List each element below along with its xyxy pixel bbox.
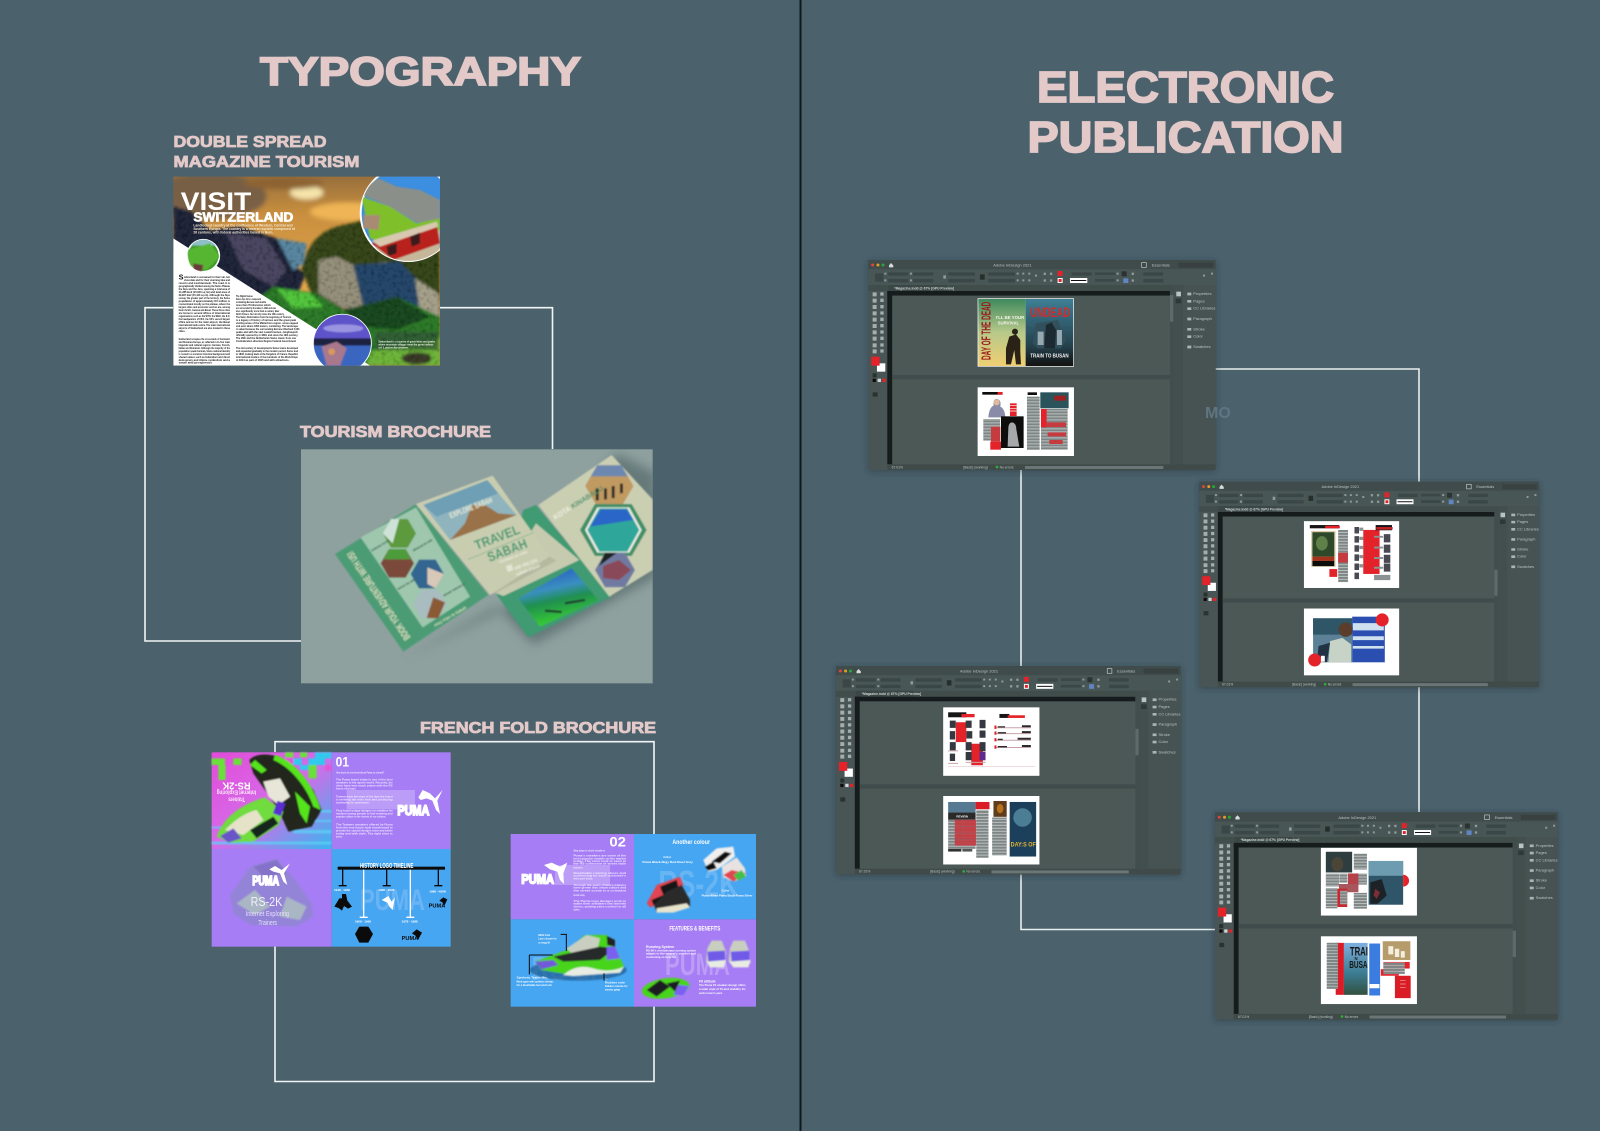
article column 2: and even where 1800 meters, combining. The landscape bbox=[236, 324, 298, 328]
window: InDesign screen two: *Magazine.indd @ 67% [GPU Preview] bbox=[1225, 507, 1283, 511]
hexagon photo: sunset pier bbox=[585, 465, 633, 507]
quadrant: 01 article: today and with style. The right shoe is bbox=[336, 831, 393, 835]
article column 1: occupy the greater part of the territory, the Swiss bbox=[179, 296, 230, 300]
panel: french fold brochure, side one bbox=[212, 752, 451, 947]
heading: double spread magazine tourism: DOUBLE SPREAD bbox=[174, 134, 326, 151]
front cover panel bbox=[416, 475, 532, 596]
screen page: movie cover spread: TRAIN TO BUSAN bbox=[1030, 354, 1069, 360]
window: InDesign screen one: 67.01% bbox=[892, 465, 903, 469]
screen page: feature spread with poster: REVIEW bbox=[956, 815, 968, 819]
window: InDesign screen four: Stroke bbox=[1536, 878, 1548, 883]
window: InDesign screen four bbox=[1215, 812, 1558, 1020]
quadrant: 01 article: The Trainers sneakers offered by Puma bbox=[336, 822, 393, 826]
article column 2: is valued because the surrounding Bernese Oberland 2,000 bbox=[236, 327, 300, 331]
icon: puma cat bbox=[418, 790, 443, 814]
screen page: movie cover spread: DAY OF THE DEAD bbox=[979, 302, 993, 360]
quadrant: another colour: Puma Black-Nrgy Red-Steel Grey bbox=[642, 860, 693, 864]
article column 1: linguistic and cultural regions: German, French, bbox=[179, 343, 230, 347]
circular photo: green valley bbox=[187, 238, 220, 272]
article column 2: in 1848, looking back at the Kingdom of France. Republic bbox=[236, 352, 298, 356]
quadrant: features and benefits: a wide style of fit and stability for bbox=[699, 987, 746, 991]
window: InDesign screen one bbox=[868, 260, 1216, 470]
quadrant: features and benefits: The Puma Fit sneaker design offers bbox=[699, 983, 746, 987]
screen page: movie cover spread: UNDEAD bbox=[1030, 304, 1070, 320]
quadrant: shoe anatomy: Mid Cut bbox=[538, 933, 550, 937]
centre divider bbox=[800, 0, 802, 1131]
title: electronic publication: ELECTRONIC bbox=[1037, 63, 1334, 112]
connector frame: magazine to brochure bbox=[145, 308, 552, 641]
cover contact details: sabah.travel bbox=[515, 563, 541, 577]
window: InDesign screen two: Color bbox=[1517, 554, 1527, 559]
window: InDesign screen three: 67.01% bbox=[859, 870, 870, 874]
quadrant: shoe anatomy: RS-2K bbox=[532, 951, 608, 988]
article column 1: shared values such as federalism and direct bbox=[179, 355, 230, 359]
left leaf: small captions bbox=[370, 538, 468, 628]
article column 1: population speak German, Swiss national identity bbox=[179, 349, 230, 353]
quadrant: 01 article: They found unique designs on sneakers for bbox=[336, 808, 393, 812]
left leaf: book your adventure: BOOK YOUR ADVENTURE WITH US! bbox=[345, 549, 413, 642]
screen page: interview spread bbox=[978, 387, 1074, 456]
connector lines: electronic publication windows bbox=[1021, 369, 1419, 930]
left leaf: small captions: easy trips to Sabah bbox=[433, 605, 468, 628]
quadrant: 02 article: 02 bbox=[609, 834, 626, 850]
screen page: movie cover spread: I'LL BE YOUR bbox=[996, 315, 1025, 320]
quadrant: features and benefits: PUMA bbox=[665, 946, 730, 982]
article column 2: and expanded gradually in the modern period. Swiss and bbox=[236, 349, 298, 353]
circular photo: red train bbox=[360, 176, 440, 262]
quadrant: RS-2K cover: Trainers bbox=[258, 918, 277, 927]
article column 2 bbox=[236, 294, 300, 362]
quadrant: history logo timeline: 1948 - 1958 bbox=[334, 888, 350, 892]
article column 1: international bank centre. The main international bbox=[179, 323, 230, 327]
article column 1: the Alps and the Jura, spanning a total area of bbox=[179, 287, 230, 291]
quadrant: shoe anatomy: Lace closure for bbox=[538, 937, 557, 941]
faint background word over window: MO bbox=[1205, 405, 1231, 422]
quadrant: 01 article: history of the brand. bbox=[336, 786, 356, 790]
magazine intro bbox=[193, 224, 296, 234]
window: InDesign screen three: Pages bbox=[1159, 704, 1170, 709]
heading: french fold brochure: FRENCH FOLD BROCHURE bbox=[420, 720, 656, 737]
article column 1: concentrated mostly on the plateau, where the bbox=[179, 302, 230, 306]
article column 2: officially opened by in 1848, and since the 19th century, bbox=[236, 333, 298, 337]
article column 2: The Digital Suisse bbox=[236, 294, 253, 298]
right leaf: inner page bbox=[495, 523, 579, 596]
article column 2: containing Bernese and double bbox=[236, 300, 266, 304]
quadrant: 02 article: Through the years, Puma's trainers bbox=[573, 883, 626, 887]
window: InDesign screen three: Color bbox=[1159, 739, 1169, 744]
quadrant: another colour: RS-2K bbox=[658, 864, 739, 905]
quadrant: 02 article: The Puma logo designs look to bbox=[573, 899, 626, 903]
cast shadows bbox=[444, 451, 652, 647]
quadrant: 02 article: PUMA bbox=[521, 872, 554, 887]
quadrant: 01 article bbox=[332, 752, 451, 849]
quadrant: 02 article: Puma's sneakers are some of the bbox=[573, 854, 627, 858]
title: typography: TYPOGRAPHY bbox=[260, 50, 581, 94]
window: InDesign screen four: [Basic] (working) bbox=[1309, 1015, 1333, 1019]
window: InDesign screen two: Paragraph bbox=[1517, 536, 1535, 541]
left leaf: small captions: SIPADAN ISLAND bbox=[412, 538, 433, 553]
article column 1: chocolate and for their stunning lake and bbox=[184, 278, 230, 282]
window: InDesign screen two bbox=[1199, 482, 1539, 687]
timeline logos: PUMA bbox=[429, 903, 445, 909]
quadrant: 02 article: feet and style. bbox=[573, 876, 594, 880]
quadrant: glitch sneaker photo: Trainers bbox=[228, 795, 245, 801]
window: InDesign screen four: Swatches bbox=[1536, 895, 1553, 900]
quadrant: 01 article: from the very future style transformed to bbox=[336, 825, 393, 829]
photo caption: of Lauterbrunnen bbox=[378, 346, 409, 350]
article column 1: largest cities and economic centres are, among bbox=[179, 305, 230, 309]
window: InDesign screen three: CC Libraries bbox=[1159, 711, 1181, 716]
window: InDesign screen three: *Magazine.indd @ 67% [GPU Preview] bbox=[862, 692, 921, 696]
article column 2: Swiss Alps form a compound bbox=[236, 297, 261, 301]
window: InDesign screen three: Stroke bbox=[1159, 732, 1171, 737]
photo caption bbox=[378, 340, 435, 348]
hexagon photo: turquoise sea bbox=[580, 504, 647, 556]
quadrant: glitch sneaker photo bbox=[212, 752, 332, 849]
window: InDesign screen four: Essentials bbox=[1495, 815, 1513, 820]
heading: double spread magazine tourism: MAGAZINE TOURISM bbox=[174, 154, 360, 171]
article column 1: are home to several offices of international bbox=[179, 311, 230, 315]
timeline logos bbox=[334, 894, 447, 943]
left leaf: small captions: GUNUNG PUTRI bbox=[370, 539, 390, 553]
quadrant: history logo timeline: 1988 - NOW bbox=[429, 890, 446, 894]
article column 1: Italian and Romansh. Although the majority of the bbox=[179, 346, 230, 350]
left leaf: small captions: MAGIC ISLAND bbox=[397, 578, 416, 591]
quadrant: shoe anatomy: Mesh upper with synthetic overlays bbox=[517, 979, 554, 983]
article column 1: resorts and Liechtenstein. The road. It is bbox=[179, 281, 230, 285]
quadrant: history logo timeline: 1958 - 1968 bbox=[355, 920, 371, 924]
article column 1: organisations such as the WTO, the WHO, the ILO, bbox=[179, 314, 230, 318]
screen page: train to busan spread: BUSA bbox=[1349, 960, 1368, 971]
quadrant: another colour: Puma White-Puma Black-Puma Silver bbox=[702, 894, 753, 898]
quadrant: 02 article: most popular models on the market bbox=[573, 856, 626, 860]
window: InDesign screen two: Essentials bbox=[1476, 484, 1494, 489]
label: kota kinabalu: KOTA KINABALU bbox=[552, 485, 605, 522]
article column 2: peaks and with the vast Lauterbrunnen, Jungfraujoch bbox=[236, 330, 298, 334]
window: InDesign screen three: [Basic] (working) bbox=[930, 870, 955, 874]
title: electronic publication bbox=[1028, 63, 1344, 162]
article column 1: them Zurich, Geneva and Basel. These three cities bbox=[179, 308, 230, 312]
window: InDesign screen one: [Basic] (working) bbox=[963, 465, 988, 469]
article column 1: office and as for the main airport, the Basel bbox=[179, 320, 230, 324]
screen page: train to busan spread: N bbox=[1354, 956, 1358, 961]
article column 1: population of approximately 8.5 million is bbox=[179, 299, 230, 303]
cover photo bbox=[424, 492, 516, 540]
article column 2: visiting areas of the Matterhorn region, snow-capped bbox=[236, 321, 298, 325]
quadrant: 01 article: How much do you know about Puma as a brand? bbox=[336, 770, 384, 774]
panel: tourism brochure mockup bbox=[301, 449, 657, 683]
window: InDesign screen two: 67.01% bbox=[1222, 682, 1233, 686]
screen page: train to busan spread: TRAI bbox=[1350, 944, 1368, 958]
window: InDesign screen one: Properties bbox=[1193, 291, 1211, 296]
quadrant: features and benefits bbox=[634, 919, 756, 1007]
article column 1: S bbox=[179, 272, 184, 281]
quadrant: history logo timeline: 1978 - 1988 bbox=[402, 920, 418, 924]
quadrant: 02 article: Breathable running shoes and bbox=[573, 871, 626, 875]
window: InDesign screen two: Pages bbox=[1517, 519, 1528, 524]
white text area bbox=[173, 238, 370, 366]
screen page: film still spread bbox=[1304, 609, 1399, 675]
quadrant: RS-2K cover: RS-2K bbox=[251, 894, 282, 909]
window: InDesign screen two: No errors bbox=[1328, 682, 1342, 686]
screen page: feature spread with poster: DAY:S OF bbox=[1011, 841, 1036, 848]
window: InDesign screen three: Essentials bbox=[1117, 669, 1135, 674]
quadrant: history logo timeline: 1968 - 1978 bbox=[378, 888, 395, 892]
window: InDesign screen two: Adobe InDesign 2021 bbox=[1322, 484, 1359, 489]
screen page: movie cover spread: SURVIVAL bbox=[998, 320, 1019, 325]
quadrant: features and benefits: each runner's pace bbox=[699, 991, 723, 995]
quadrant: 01 article: cushioning for sportswear. bbox=[336, 800, 369, 804]
quadrant: 01 article: sneakers in the sports world. Recently, the bbox=[336, 780, 393, 784]
quadrant: 01 article: modern young people to feel running and bbox=[336, 811, 393, 815]
quadrant: features and benefits: Running System bbox=[646, 945, 675, 949]
quadrant: shoe anatomy bbox=[511, 919, 634, 1007]
heading: double spread magazine tourism bbox=[174, 134, 360, 171]
photo caption: Switzerland is a country of great lakes and peaks bbox=[378, 340, 435, 344]
quadrant: glitch sneaker photo: RS-2K bbox=[222, 780, 251, 791]
article column 2: is a legacy of history of various and the great peak bbox=[236, 318, 296, 322]
cover title: travel sabah: TRAVEL bbox=[472, 522, 522, 553]
window: InDesign screen one: *Magazine.indd @ 67% [GPU Preview] bbox=[894, 286, 954, 290]
quadrant: shoe anatomy: Rubber outsole for bbox=[605, 984, 628, 988]
screen page: train to busan spread bbox=[1321, 936, 1417, 1004]
article column 2: The 26th and the Netherlands Swiss travel, from one bbox=[236, 336, 296, 340]
quadrant: 02 article: the street scene is a constant bbox=[573, 888, 626, 892]
magazine intro: Landlocked country at the confluence of Western, Central and bbox=[193, 224, 293, 228]
screen page: cast and ratings spread bbox=[943, 707, 1039, 776]
article column 2: international treaties of the hundreds of the World Expo bbox=[236, 355, 298, 359]
window: InDesign screen four: No errors bbox=[1345, 1015, 1359, 1019]
quadrant: 02 article: today. The retro look is seen in bbox=[573, 859, 626, 863]
article column 1: witzerland is renowned for their ski, hot bbox=[183, 275, 230, 279]
article column 1: and Romance Europe, as reflected in its four main bbox=[179, 340, 230, 344]
photo: sunset sky bbox=[173, 176, 440, 366]
circular photo: lake town at dusk bbox=[314, 314, 372, 366]
article column 1: 39,997 km2 (15,443 sq mi). Although the Alps bbox=[179, 293, 230, 297]
window: InDesign screen two: Swatches bbox=[1517, 564, 1534, 569]
quadrant: shoe anatomy: a snug fit bbox=[538, 940, 550, 944]
hexagon photos: left leaf bbox=[381, 519, 447, 618]
panel: french fold brochure, side two bbox=[511, 834, 756, 1007]
quadrant: another colour: Another colour bbox=[672, 839, 710, 846]
quadrant: shoe anatomy: for a breathable feel and look bbox=[517, 983, 552, 987]
quadrant: 02 article: favorite today. bbox=[573, 893, 585, 897]
window: InDesign screen one: No errors bbox=[1000, 465, 1014, 469]
quadrant: 02 article: trainers. bbox=[573, 866, 584, 870]
left leaf: small captions: MOUNT KINABALU bbox=[442, 582, 466, 598]
article column 2: also significantly more than a century later bbox=[236, 309, 280, 313]
quadrant: RS-2K cover: Internet Exploring bbox=[246, 909, 289, 918]
article column 1 bbox=[179, 272, 230, 364]
quadrant: 01 article: yours. bbox=[336, 834, 343, 838]
window: InDesign screen two: Stroke bbox=[1517, 546, 1528, 551]
window: InDesign screen three: Swatches bbox=[1159, 749, 1176, 754]
timeline logos: PUMA bbox=[402, 936, 418, 942]
window: InDesign screen three: Properties bbox=[1159, 697, 1177, 702]
article column 1: 41,285 km2 (15,940 sq mi) and land area of bbox=[179, 290, 230, 294]
quadrant: RS-2K cover: PUMA bbox=[252, 874, 279, 888]
quadrant: features and benefits: Fit attitude bbox=[699, 980, 716, 984]
panel: magazine double spread bbox=[173, 176, 440, 366]
article column 2: The Swiss Reformation from the beginning of Tourism bbox=[236, 315, 291, 319]
left leaf: light inner panel bbox=[361, 507, 470, 627]
photo: alpine valley bbox=[173, 207, 440, 366]
quadrant: 02 article bbox=[511, 834, 634, 919]
quadrant: features and benefits: adapts to the wearer's comfort and bbox=[646, 952, 696, 956]
hexagon photo: river rafting bbox=[595, 553, 635, 587]
quadrant: 02 article: cushioning for each customer's bbox=[573, 874, 627, 878]
right leaf: beige panel bbox=[538, 455, 653, 597]
quadrant: another colour: Color bbox=[663, 855, 672, 859]
screen page: feature spread with poster bbox=[943, 796, 1039, 864]
quadrant: features and benefits: FEATURES & BENEFITS bbox=[669, 926, 720, 933]
screen page: train article spread bbox=[1321, 848, 1417, 916]
quadrant: 02 article: have grown into urban culture and bbox=[573, 886, 626, 890]
window: InDesign screen three: Paragraph bbox=[1159, 722, 1177, 727]
quadrant: 01 article: PUMA bbox=[397, 802, 429, 818]
window: InDesign screen four: Paragraph bbox=[1536, 868, 1554, 873]
quadrant: another colour: Color bbox=[722, 889, 730, 893]
article column 2: The mid century of developments Swiss towns developed bbox=[236, 346, 298, 350]
quadrant: 01 article: 01 bbox=[336, 754, 349, 770]
quadrant: 01 article: shoe have won much praise with the RS bbox=[336, 783, 393, 787]
quadrant: 01 article: The Puma brand today is one of the best bbox=[336, 777, 393, 781]
window: InDesign screen one: Adobe InDesign 2021 bbox=[993, 263, 1032, 268]
quadrant: 02 article: the RS collection of street style bbox=[573, 862, 627, 866]
window: InDesign screen four: 67.01% bbox=[1238, 1015, 1249, 1019]
quadrant: 02 article: styles. bbox=[573, 908, 580, 912]
window: InDesign screen four: CC Libraries bbox=[1536, 857, 1558, 862]
magazine intro: Southern Europe. The country is a federal republic composed of bbox=[193, 227, 296, 231]
article column 2: in 1914 as part of 1815 and with attractions. bbox=[236, 358, 289, 362]
quadrant: RS-2K cover bbox=[212, 849, 332, 947]
window: InDesign screen two: Properties bbox=[1517, 512, 1535, 517]
quadrant: 01 article: is reviving the retro look and producing bbox=[336, 797, 393, 801]
article column 1: is rooted in a common historical background and bbox=[179, 352, 230, 356]
cover contact details bbox=[499, 550, 540, 576]
quadrant: another colour bbox=[634, 834, 756, 919]
article column 1: airports of Switzerland are also located in these bbox=[179, 326, 230, 330]
title: electronic publication: PUBLICATION bbox=[1028, 113, 1344, 162]
window: InDesign screen one: Stroke bbox=[1193, 326, 1206, 331]
quadrant: history logo timeline: PUMA bbox=[360, 884, 425, 917]
quadrant: 01 article: provide the special designs more and better bbox=[336, 828, 393, 832]
quadrant: history logo timeline: HISTORY LOGO TIMELINE bbox=[360, 863, 414, 870]
window: InDesign screen three: Adobe InDesign 2021 bbox=[960, 669, 998, 674]
quadrant: 01 article: popular culture in the streets of our culture. bbox=[336, 814, 386, 818]
magazine heading: visit: VISIT bbox=[181, 188, 252, 216]
cover title on photo: EXPLORE SABAH bbox=[448, 495, 494, 520]
window: InDesign screen one: Paragraph bbox=[1193, 316, 1212, 321]
window: InDesign screen four: Properties bbox=[1536, 843, 1554, 848]
article column 1: cities. bbox=[179, 329, 185, 333]
window: InDesign screen four: *Magazine.indd @ 67% [GPU Preview] bbox=[1241, 838, 1299, 842]
window: InDesign screen four: Color bbox=[1536, 885, 1546, 890]
quadrant: 02 article: Step away to street sneakers bbox=[573, 849, 605, 853]
article column 1: geographically divided among the Swiss Plateau bbox=[179, 284, 230, 288]
article column 2: North France. Our old city since the 13th century, bbox=[236, 312, 284, 316]
right leaf: lagoon photo bbox=[518, 568, 598, 627]
cover contact details: 088 456 234 bbox=[514, 557, 538, 571]
left leaf: green back panel bbox=[335, 504, 488, 652]
magazine intro: 26 cantons, with federal authorities based in Bern. bbox=[193, 230, 273, 234]
quadrant: shoe anatomy: Synthetic Textile Mix bbox=[517, 975, 547, 979]
window: InDesign screen two: CC Libraries bbox=[1517, 526, 1539, 531]
window: InDesign screen three bbox=[836, 666, 1181, 874]
quadrant: 02 article: make their sneakers the favorite bbox=[573, 902, 627, 906]
article column 2: Confederation directive Region Federal Government bbox=[236, 339, 296, 343]
quadrant: features and benefits: cushioning on long run bbox=[646, 955, 676, 959]
window: InDesign screen four: Pages bbox=[1536, 850, 1547, 855]
window: InDesign screen one: Pages bbox=[1193, 298, 1205, 303]
heading: tourism brochure: TOURISM BROCHURE bbox=[300, 424, 491, 441]
quadrant: history logo timeline bbox=[332, 849, 451, 947]
window: InDesign screen one: Essentials bbox=[1152, 263, 1170, 268]
right leaf: green strip bbox=[497, 505, 612, 637]
cover contact details: Contact us now bbox=[499, 549, 529, 564]
photo caption: where mountain villages meet the green valleys bbox=[378, 343, 434, 347]
screen page: movie cover spread bbox=[978, 298, 1074, 367]
article column 1: the headquarters of FIFA, the UN's second largest bbox=[179, 317, 230, 321]
quadrant: glitch sneaker photo: Internet Exploring bbox=[216, 789, 256, 795]
quadrant: 02 article: shoes, putting extra comfort in all bbox=[573, 904, 626, 908]
quadrant: 01 article: Trainers bear the mark of the time the brand bbox=[336, 794, 393, 798]
article column 1: Switzerland occupies the crossroads of Germanic bbox=[179, 337, 230, 341]
article column 1: small and prosperous bbox=[179, 360, 212, 364]
window: InDesign screen two: [Basic] (working) bbox=[1292, 682, 1316, 686]
screen page: poster and cast spread bbox=[1304, 521, 1399, 588]
quadrant: shoe anatomy: extra grip bbox=[605, 988, 620, 992]
article column 2: more than 70 kilometres which bbox=[236, 303, 271, 307]
window: InDesign screen one: CC Libraries bbox=[1193, 306, 1215, 311]
window: InDesign screen four: Adobe InDesign 2021 bbox=[1338, 815, 1376, 820]
window: InDesign screen one: Swatches bbox=[1193, 344, 1211, 349]
article column 2: are surrounded by the lakes in 1291 and was bbox=[236, 306, 276, 310]
article column 1: democracy and Alpine symbolism and a bbox=[179, 358, 230, 362]
window: InDesign screen three: No errors bbox=[966, 870, 980, 874]
quadrant: shoe anatomy: Rubber sole bbox=[605, 980, 625, 984]
connector frame: french fold brochure bbox=[275, 742, 654, 1082]
window: InDesign screen one: Color bbox=[1193, 334, 1203, 339]
cover title: travel sabah bbox=[473, 526, 528, 562]
cover title: travel sabah: SABAH bbox=[485, 536, 529, 565]
quadrant: features and benefits: RS-2K's revolutionary running system bbox=[646, 948, 696, 952]
magazine heading: switzerland: SWITZERLAND bbox=[193, 211, 293, 225]
